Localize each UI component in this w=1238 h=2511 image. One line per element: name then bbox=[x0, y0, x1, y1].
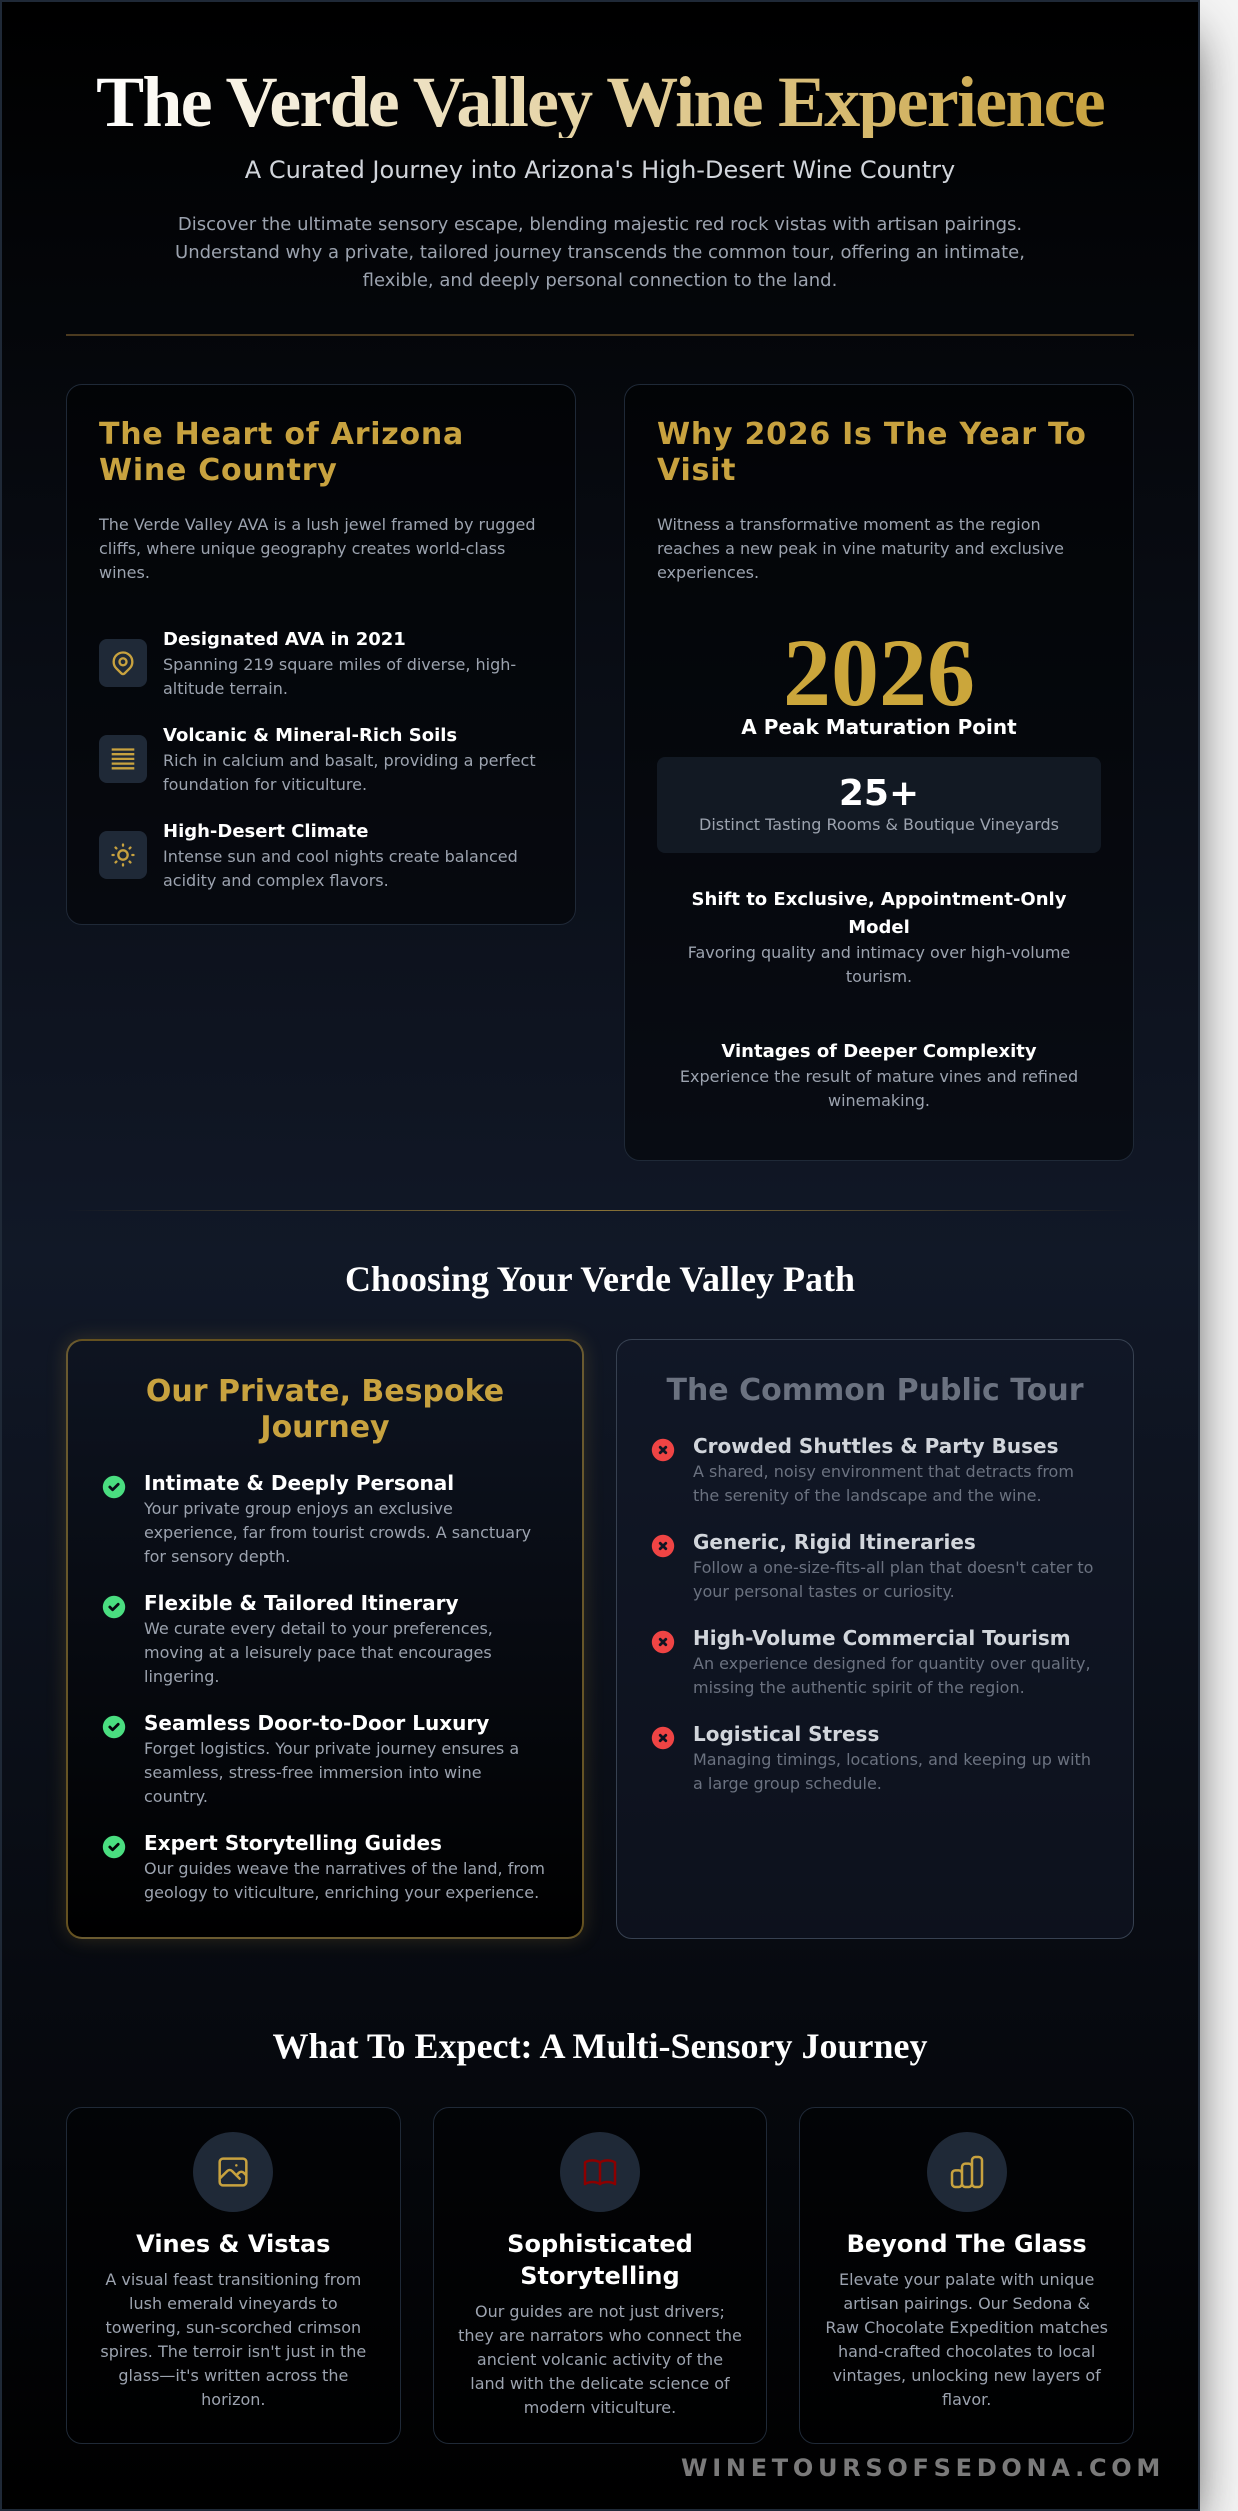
card text: hand-crafted chocolates to local bbox=[838, 2342, 1095, 2361]
fact: designated AVA: altitude terrain. bbox=[163, 679, 288, 698]
card title: Vines & Vistas bbox=[136, 2230, 330, 2258]
card title: Sophisticated bbox=[507, 2230, 693, 2258]
drawback: commercial: High-Volume Commercial Tourism bbox=[693, 1626, 1071, 1650]
benefit list bbox=[102, 1471, 545, 1902]
panel heading bbox=[99, 417, 464, 488]
panel intro: The Verde Valley AVA is a lush jewel framed by rugged bbox=[99, 515, 536, 534]
icon: cross bbox=[652, 1726, 674, 1750]
stat number: 25+ bbox=[839, 773, 919, 814]
drawback: crowded: the serenity of the landscape and the wine. bbox=[693, 1486, 1042, 1505]
card text: A visual feast transitioning from bbox=[105, 2270, 361, 2289]
benefit: intimate: experience, far from tourist crowds. A sanctuary bbox=[144, 1523, 531, 1542]
panel heading: Wine Country bbox=[99, 453, 338, 488]
icon: check bbox=[102, 1716, 126, 1738]
big year: 2026 bbox=[783, 619, 975, 726]
footer website: WINETOURSOFSEDONA.COM bbox=[681, 2454, 1165, 2482]
drawback: crowded: A shared, noisy environment that detracts from bbox=[693, 1462, 1074, 1481]
card text: horizon. bbox=[201, 2390, 266, 2409]
panel heading: Why 2026 Is The Year To bbox=[657, 417, 1087, 452]
point: complexity bbox=[680, 1041, 1078, 1110]
point: exclusive model: Shift to Exclusive, Appointment-Only bbox=[692, 889, 1066, 910]
fact: designated AVA bbox=[99, 629, 516, 698]
card text: artisan pairings. Our Sedona & bbox=[843, 2294, 1090, 2313]
benefit: guides bbox=[102, 1831, 545, 1902]
panel intro bbox=[657, 515, 1064, 582]
point: complexity: winemaking. bbox=[828, 1091, 930, 1110]
fact: climate: acidity and complex flavors. bbox=[163, 871, 389, 890]
icon: cross bbox=[652, 1630, 674, 1654]
card title: Beyond The Glass bbox=[847, 2230, 1087, 2258]
card text: Raw Chocolate Expedition matches bbox=[825, 2318, 1108, 2337]
fact: soils: foundation for viticulture. bbox=[163, 775, 367, 794]
benefit: intimate bbox=[102, 1471, 531, 1566]
card text bbox=[825, 2270, 1108, 2409]
fact: designated AVA: Spanning 219 square miles of diverse, high- bbox=[163, 655, 516, 674]
card title: Storytelling bbox=[520, 2262, 680, 2290]
icon: soil layers bbox=[99, 735, 147, 783]
benefit: intimate: Your private group enjoys an exclusive bbox=[144, 1499, 453, 1518]
drawback: crowded bbox=[652, 1434, 1074, 1505]
drawback: stress: Logistical Stress bbox=[693, 1722, 879, 1746]
panel heading bbox=[657, 417, 1087, 488]
icon: check bbox=[102, 1836, 126, 1858]
point: exclusive model: tourism. bbox=[846, 967, 912, 986]
drawback: rigid bbox=[652, 1530, 1093, 1601]
panel intro: Witness a transformative moment as the region bbox=[657, 515, 1041, 534]
stat label: Distinct Tasting Rooms & Boutique Vineyards bbox=[699, 815, 1059, 834]
card text: spires. The terroir isn't just in the bbox=[100, 2342, 366, 2361]
icon: bar chart bbox=[927, 2132, 1007, 2212]
point: exclusive model: Favoring quality and intimacy over high-volume bbox=[688, 943, 1070, 962]
drawback: rigid: your personal tastes or curiosity. bbox=[693, 1582, 955, 1601]
benefit: door to door bbox=[102, 1711, 519, 1806]
icon: map pin bbox=[99, 639, 147, 687]
title: The Verde Valley Wine Experience bbox=[96, 62, 1104, 142]
drawback: commercial: An experience designed for quantity over quality, bbox=[693, 1654, 1091, 1673]
fact: climate: Intense sun and cool nights create balanced bbox=[163, 847, 518, 866]
icon: cross bbox=[652, 1534, 674, 1558]
panel: vines and vistas bbox=[66, 2107, 401, 2444]
drawback: commercial: missing the authentic spirit of the region. bbox=[693, 1678, 1025, 1697]
subtitle: A Curated Journey into Arizona's High-Desert Wine Country bbox=[245, 156, 955, 184]
icon: landscape picture bbox=[193, 2132, 273, 2212]
card text: towering, sun-scorched crimson bbox=[105, 2318, 361, 2337]
panel intro: cliffs, where unique geography creates world-class bbox=[99, 539, 505, 558]
point: exclusive model: Model bbox=[848, 917, 910, 938]
benefit: flexible: Flexible & Tailored Itinerary bbox=[144, 1591, 459, 1615]
benefit: flexible: lingering. bbox=[144, 1667, 219, 1686]
intro text: Discover the ultimate sensory escape, blending majestic red rock vistas with artisan pairings. bbox=[178, 214, 1022, 235]
card text: Elevate your palate with unique bbox=[839, 2270, 1094, 2289]
panel heading bbox=[146, 1374, 504, 1445]
panel heading: The Heart of Arizona bbox=[99, 417, 464, 452]
panel intro bbox=[98, 515, 536, 582]
icon: sun bbox=[99, 831, 147, 879]
panel: beyond the glass bbox=[799, 2107, 1134, 2444]
card text bbox=[458, 2302, 742, 2417]
fact: soils: Rich in calcium and basalt, providing a perfect bbox=[163, 751, 536, 770]
benefit: guides: Our guides weave the narratives of the land, from bbox=[144, 1859, 545, 1878]
drawback: rigid: Follow a one-size-fits-all plan that doesn't cater to bbox=[693, 1558, 1093, 1577]
benefit: guides: geology to viticulture, enriching your experience. bbox=[144, 1883, 539, 1902]
icon: open book bbox=[560, 2132, 640, 2212]
card text: flavor. bbox=[942, 2390, 991, 2409]
fact: soils: Volcanic & Mineral-Rich Soils bbox=[163, 725, 457, 746]
panel: why 2026 bbox=[624, 384, 1134, 1161]
intro text bbox=[175, 214, 1025, 291]
section heading: what to expect: What To Expect: A Multi-Sensory Journey bbox=[272, 2026, 928, 2066]
point: complexity: Experience the result of mature vines and refined bbox=[680, 1067, 1078, 1086]
year caption: A Peak Maturation Point bbox=[741, 715, 1017, 739]
benefit: door to door: country. bbox=[144, 1787, 208, 1806]
card title bbox=[507, 2230, 693, 2290]
drawback: rigid: Generic, Rigid Itineraries bbox=[693, 1530, 976, 1554]
intro text: Understand why a private, tailored journey transcends the common tour, offering an intimate, bbox=[175, 242, 1025, 263]
panel heading: Journey bbox=[260, 1410, 390, 1445]
benefit: door to door: Forget logistics. Your private journey ensures a bbox=[144, 1739, 519, 1758]
fact: climate: High-Desert Climate bbox=[163, 821, 368, 842]
card text: vintages, unlocking new layers of bbox=[833, 2366, 1101, 2385]
benefit: flexible bbox=[102, 1591, 493, 1686]
section heading: choosing path: Choosing Your Verde Valley Path bbox=[345, 1259, 855, 1299]
fact: designated AVA: Designated AVA in 2021 bbox=[163, 629, 406, 650]
panel intro: reaches a new peak in vine maturity and exclusive bbox=[657, 539, 1064, 558]
card text bbox=[100, 2270, 366, 2409]
intro text: flexible, and deeply personal connection to the land. bbox=[363, 270, 837, 291]
panel: sophisticated storytelling bbox=[433, 2107, 767, 2444]
benefit: flexible: moving at a leisurely pace that encourages bbox=[144, 1643, 492, 1662]
panel: heart of Arizona wine country bbox=[66, 384, 576, 925]
stat box bbox=[657, 757, 1101, 853]
drawback list bbox=[652, 1434, 1093, 1793]
panel heading: The Common Public Tour bbox=[666, 1373, 1084, 1408]
card text: lush emerald vineyards to bbox=[129, 2294, 338, 2313]
drawback: stress bbox=[652, 1722, 1091, 1793]
point: exclusive model bbox=[688, 889, 1070, 986]
benefit: flexible: We curate every detail to your preferences, bbox=[144, 1619, 493, 1638]
benefit: door to door: seamless, stress-free immersion into wine bbox=[144, 1763, 482, 1782]
panel heading: Visit bbox=[657, 453, 736, 488]
card text: glass—it's written across the bbox=[118, 2366, 348, 2385]
fact: soils bbox=[99, 725, 536, 794]
panel: private bespoke journey bbox=[66, 1339, 584, 1939]
card text: modern viticulture. bbox=[524, 2398, 676, 2417]
benefit: door to door: Seamless Door-to-Door Luxury bbox=[144, 1711, 489, 1735]
panel: common public tour bbox=[616, 1339, 1134, 1939]
drawback: stress: a large group schedule. bbox=[693, 1774, 882, 1793]
drawback: crowded: Crowded Shuttles & Party Buses bbox=[693, 1434, 1059, 1458]
card text: Our guides are not just drivers; bbox=[475, 2302, 725, 2321]
panel heading: Our Private, Bespoke bbox=[146, 1374, 504, 1409]
card text: ancient volcanic activity of the bbox=[477, 2350, 723, 2369]
benefit: intimate: for sensory depth. bbox=[144, 1547, 290, 1566]
panel intro: experiences. bbox=[657, 563, 759, 582]
fact: climate bbox=[99, 821, 518, 890]
icon: cross bbox=[652, 1438, 674, 1462]
icon: check bbox=[102, 1476, 126, 1498]
benefit: guides: Expert Storytelling Guides bbox=[144, 1831, 442, 1855]
panel intro: wines. bbox=[99, 563, 150, 582]
benefit: intimate: Intimate & Deeply Personal bbox=[144, 1471, 454, 1495]
point: complexity: Vintages of Deeper Complexity bbox=[721, 1041, 1037, 1062]
icon: check bbox=[102, 1596, 126, 1618]
card text: they are narrators who connect the bbox=[458, 2326, 742, 2345]
drawback: stress: Managing timings, locations, and keeping up with bbox=[693, 1750, 1091, 1769]
card text: land with the delicate science of bbox=[470, 2374, 730, 2393]
drawback: commercial bbox=[652, 1626, 1091, 1697]
